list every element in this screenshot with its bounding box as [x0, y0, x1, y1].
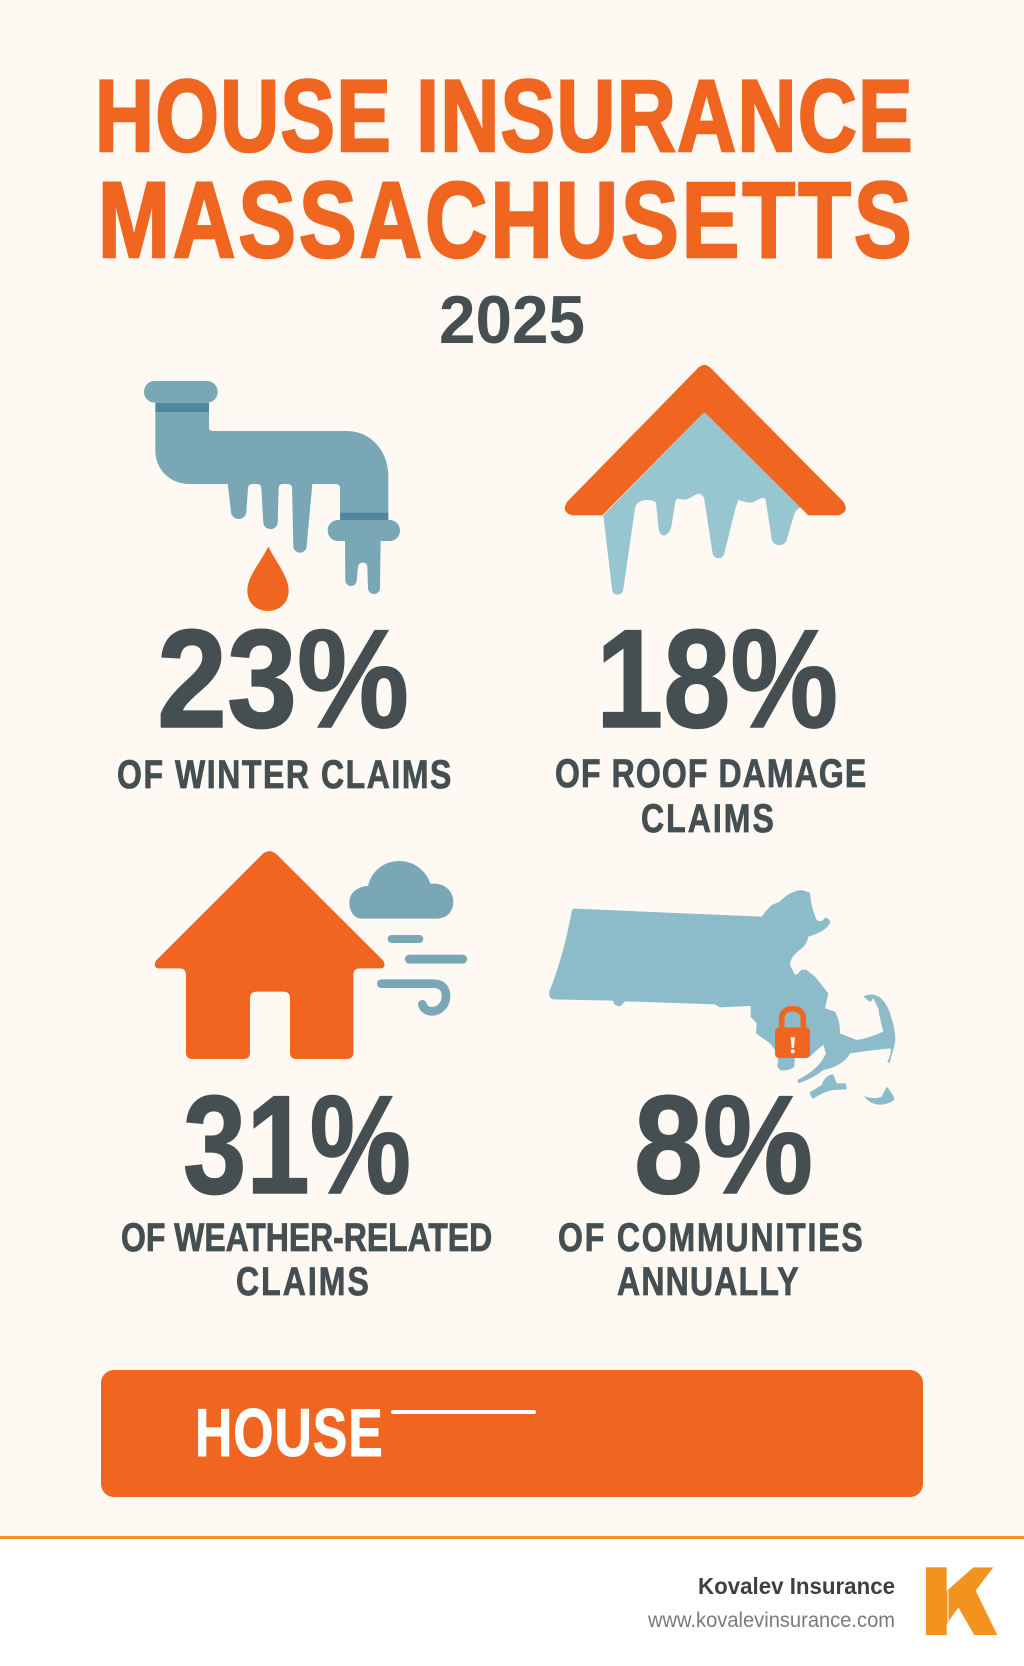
brand name: Kovalev Insurance [698, 1573, 895, 1599]
stat: 8% of communities annually [558, 1066, 863, 1304]
stat: 18% of roof damage claims: OF ROOF DAMAGE [555, 751, 866, 796]
subtitle: year: 2025 [439, 282, 585, 358]
stat: 31% of weather-related claims [121, 1066, 492, 1304]
stat: 31% of weather-related claims: OF WEATHER-RELATED [121, 1215, 492, 1260]
icon: roof with icicles [565, 365, 846, 595]
title [95, 58, 913, 280]
footer [0, 1536, 1024, 1666]
stat: 8% of communities annually: 8% [634, 1066, 813, 1223]
title: MASSACHUSETTS [98, 159, 912, 280]
stat: 23% of winter claims: OF WINTER CLAIMS [117, 752, 451, 797]
stat: 23% of winter claims: 23% [157, 600, 409, 757]
banner: HOUSE [195, 1394, 383, 1471]
stat: 18% of roof damage claims: 18% [596, 600, 838, 757]
icon: Massachusetts map with padlock [549, 890, 895, 1105]
icon: house with cloud and wind [155, 851, 467, 1059]
stat: 18% of roof damage claims [555, 600, 866, 841]
website: www.kovalevinsurance.com [647, 1609, 895, 1632]
title: HOUSE INSURANCE [95, 58, 913, 173]
stat: 18% of roof damage claims: CLAIMS [641, 796, 774, 841]
stat: 31% of weather-related claims: CLAIMS [236, 1259, 369, 1304]
logo: K [926, 1567, 997, 1635]
banner [101, 1370, 923, 1497]
stat: 8% of communities annually: ANNUALLY [617, 1259, 799, 1304]
icon: frozen leaking pipe [144, 381, 400, 611]
stat: 23% of winter claims [117, 600, 451, 797]
stat: 31% of weather-related claims: 31% [183, 1066, 411, 1223]
stat: 8% of communities annually: OF COMMUNITIES [558, 1215, 863, 1260]
icon: padlock [775, 1009, 810, 1058]
